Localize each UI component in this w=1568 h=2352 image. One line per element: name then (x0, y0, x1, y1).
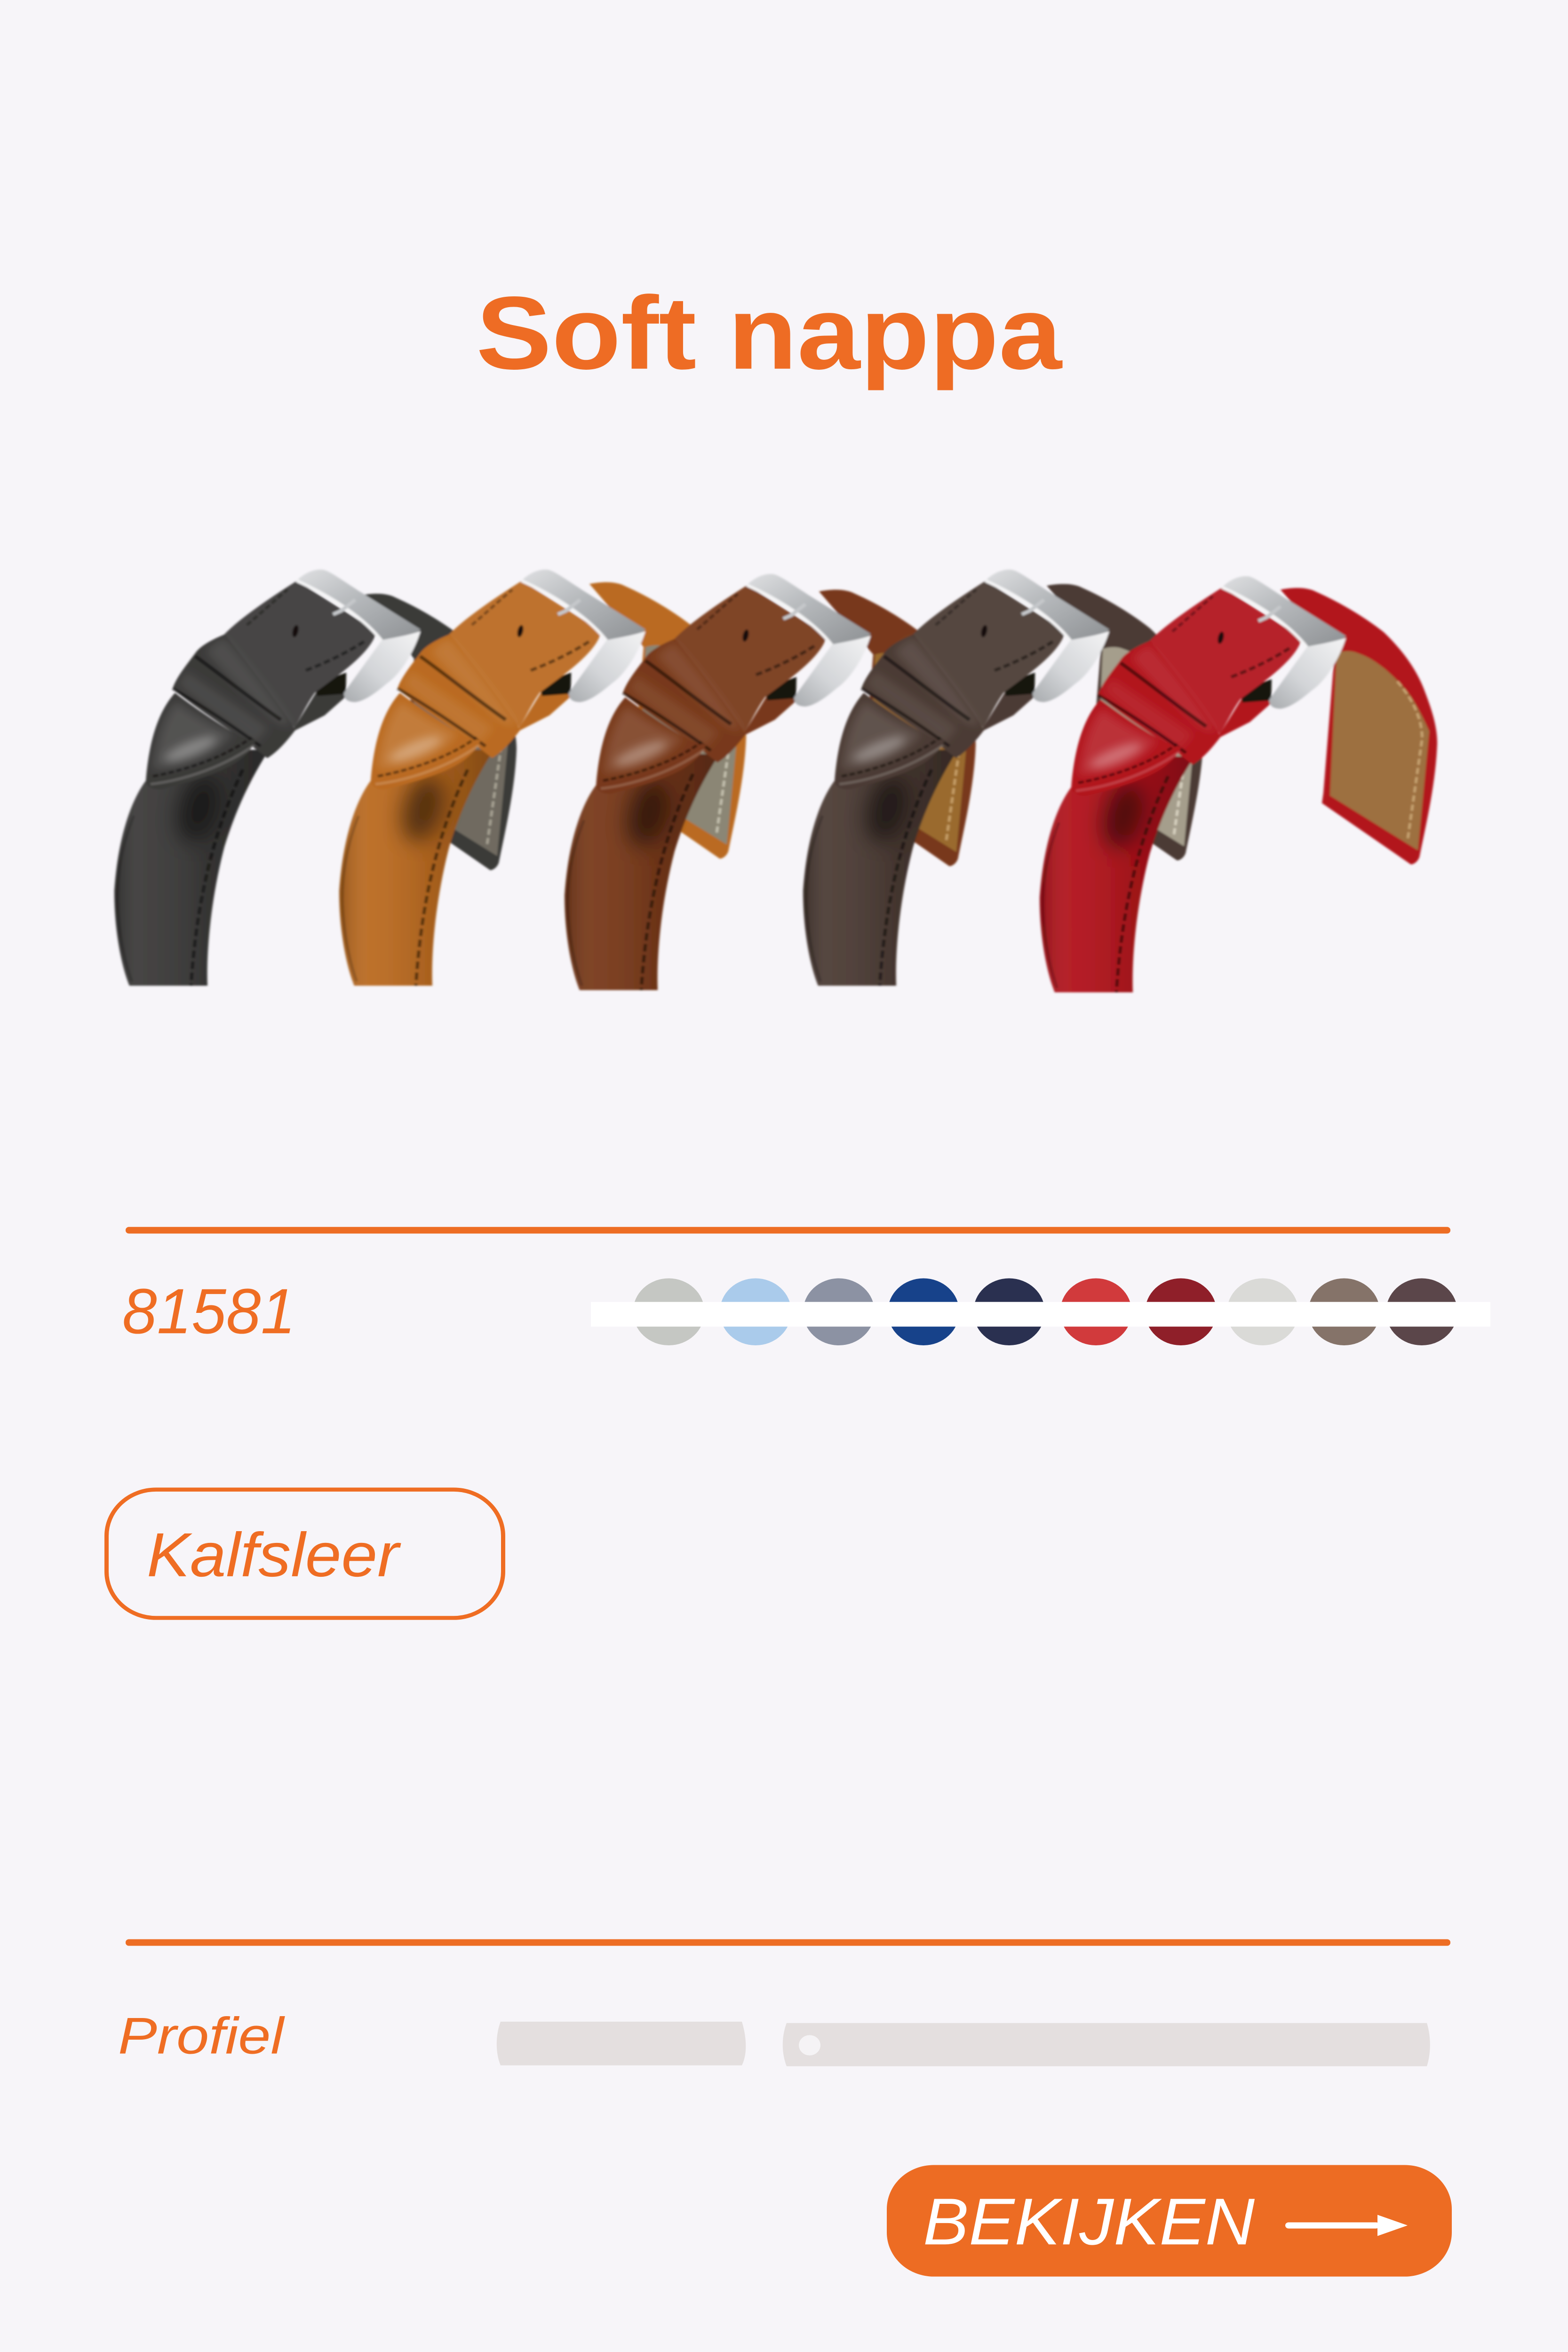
icon: arrow (1285, 2215, 1408, 2236)
material tag: Kalfsleer (106, 1490, 503, 1618)
profile icon: short strap piece (497, 2022, 746, 2066)
profile icon: long strap piece with hole (783, 2023, 1430, 2066)
divider: article section (126, 1227, 1450, 1233)
strap: red (1040, 576, 1437, 993)
article number: 81581 (122, 1275, 295, 1347)
strap: brown (565, 574, 976, 990)
product photo: five leather watch straps (114, 570, 1437, 993)
material tag: Kalfsleer: Kalfsleer (147, 1520, 402, 1589)
button: bekijken (887, 2165, 1452, 2277)
profile label: Profiel (118, 2007, 285, 2065)
colour swatches (591, 1279, 1490, 1345)
divider: profile section (126, 1939, 1450, 1946)
strap: dark brown (803, 570, 1203, 985)
strap: black (114, 570, 517, 985)
title: Soft nappa (476, 276, 1063, 391)
strap: cognac (339, 570, 746, 985)
button: bekijken: BEKIJKEN (923, 2185, 1255, 2258)
